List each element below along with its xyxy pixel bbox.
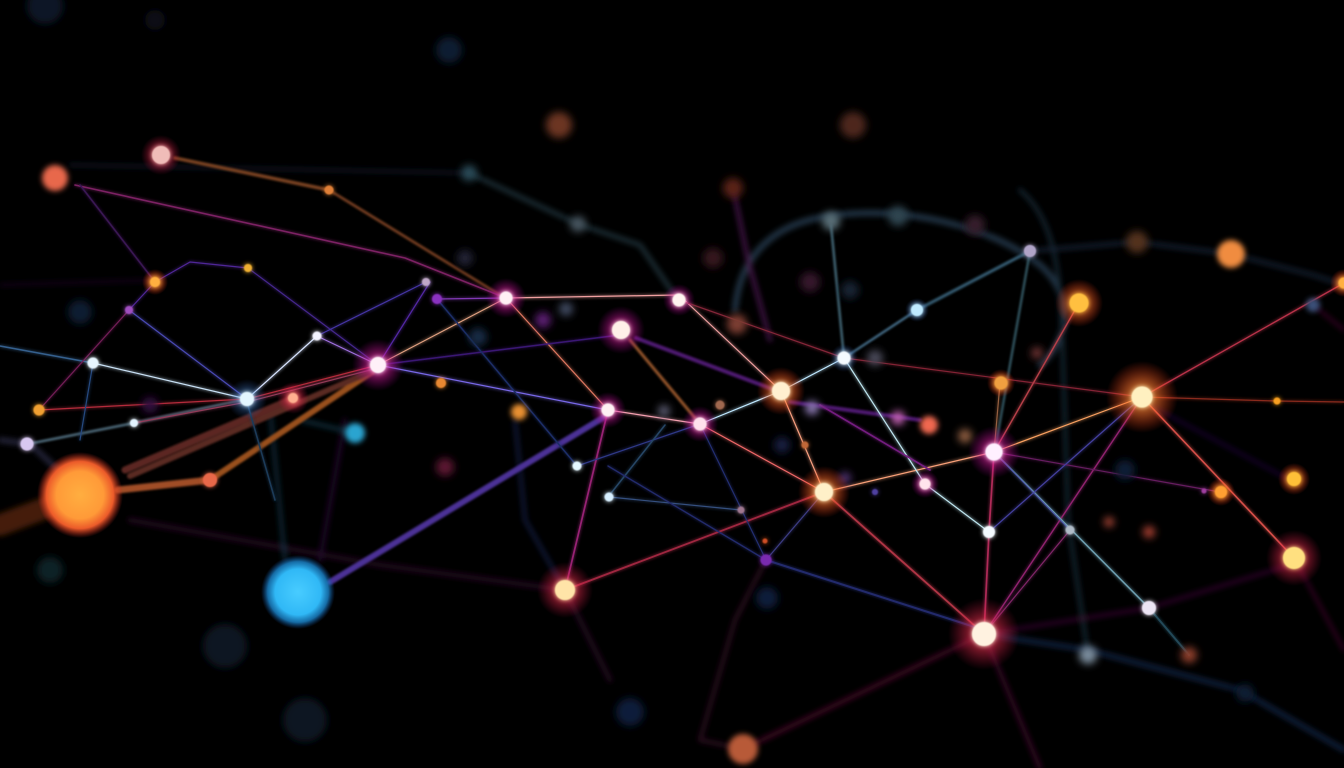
background blurred network links bbox=[0, 165, 1344, 768]
sharp bright nodes bbox=[20, 146, 1344, 646]
sharp network links bbox=[0, 185, 1344, 655]
thick glowing links to the large orange and blue nodes bbox=[0, 158, 1030, 582]
large orange node bbox=[37, 452, 123, 538]
large blue node bbox=[261, 555, 335, 629]
glow halos bbox=[141, 135, 1344, 670]
soft glowing accent nodes bbox=[42, 165, 1320, 764]
